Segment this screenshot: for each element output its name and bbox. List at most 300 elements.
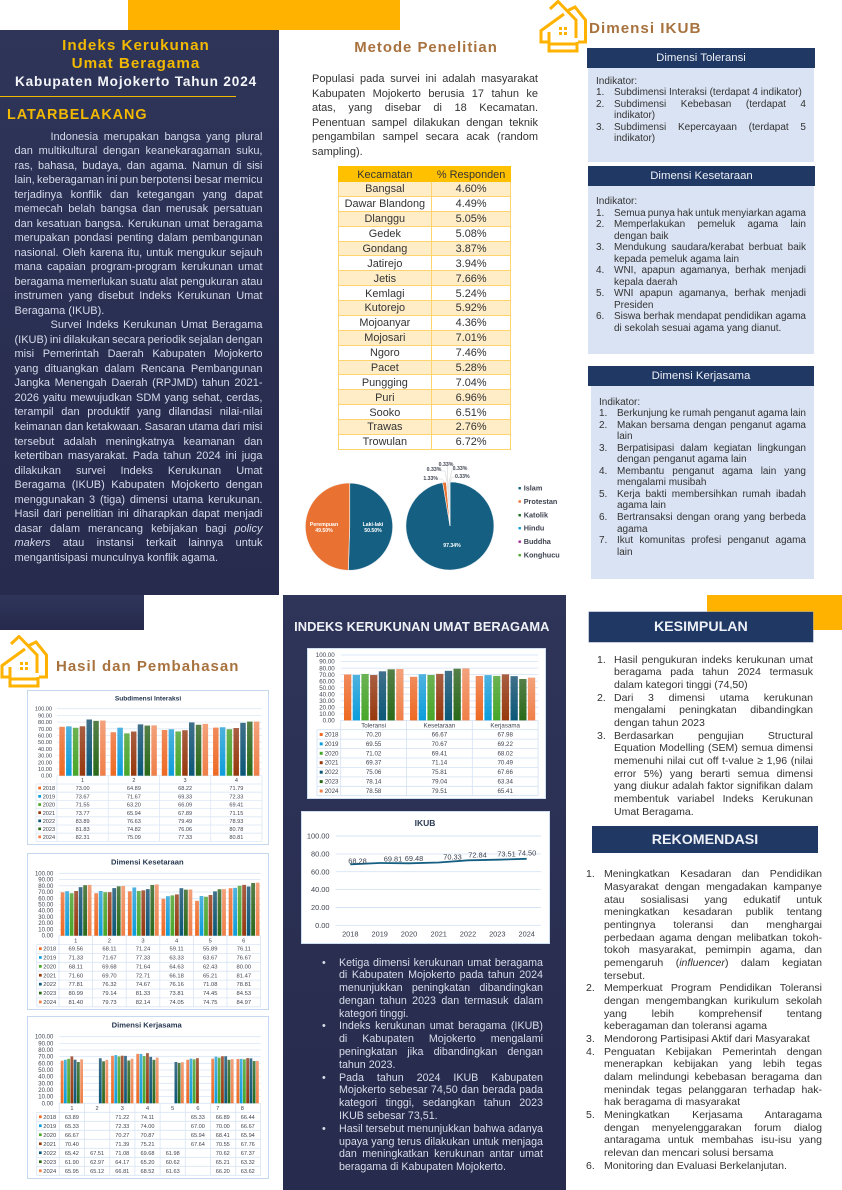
icon: house hasil (0, 635, 48, 688)
text: rekomendasi: Meningkatkan Kerjasama Antaragama (604, 1109, 822, 1121)
title (15, 36, 257, 89)
text: kesimpulan (597, 654, 813, 818)
chart: subdimensi interaksi: 64.89 (127, 786, 141, 792)
orange header band (128, 0, 400, 30)
chart: dimensi kesetaraan: 76.67 (237, 956, 251, 962)
chart: subdimensi interaksi: 66.09 (178, 803, 192, 809)
text: 4. (586, 1046, 595, 1058)
chart: ikub line: 69.81 (384, 854, 402, 863)
chart: dimensi kerjasama: 66.44 (241, 1115, 255, 1121)
chart: dimensi kesetaraan: 65.21 (203, 973, 217, 979)
table: responden per kecamatan: 5.24% (456, 288, 487, 300)
chart: ikub line: 0.00 (315, 921, 330, 930)
panel header (588, 166, 815, 186)
chart: dimensi kesetaraan: 4 (175, 938, 179, 944)
panel: dimensi toleransi: 1. (596, 87, 604, 98)
text: rekomendasi: tokoh masyarakat, pemimpin agama, dan (604, 944, 822, 956)
chart: dimensi kesetaraan: 66.18 (169, 973, 184, 979)
text: rekomendasi: Masyarakat dengan mengadakan kampanye (604, 881, 822, 893)
chart: dimensi kerjasama: 65.33 (65, 1124, 79, 1130)
chart: dimensi utama per tahun: 20.00 (320, 705, 336, 712)
chart: dimensi kesetaraan: 2022 (43, 982, 56, 988)
chart: dimensi kesetaraan: 78.81 (237, 982, 251, 988)
text: 3. (586, 1033, 595, 1045)
text: rekomendasi: keberagaman dan toleransi agama (604, 1020, 767, 1032)
text: rekomendasi: yang lebih komprehensif tentang (604, 1008, 822, 1020)
chart: ikub line: 2022 (460, 930, 476, 939)
chart: subdimensi interaksi: 79.49 (178, 819, 192, 825)
chart: dimensi kesetaraan: 80.00 (38, 884, 54, 890)
chart: dimensi kesetaraan: 79.73 (102, 1000, 117, 1006)
text: rekomendasi: menindak tegas pelanggaran terhadap hak- (604, 1084, 822, 1096)
chart: dimensi kesetaraan: 3 (141, 938, 145, 944)
text: kesimpulan: memenuhi nilai cut off t-value ≥ 1,96 (nilai (614, 755, 813, 767)
text: bullet points: peningkatan jika dibandingkan dengan (339, 1046, 543, 1058)
chart: dimensi kerjasama: 1 (70, 1106, 73, 1112)
text: kesimpulan: Dari 3 dimensi utama kerukunan (614, 692, 813, 704)
chart: subdimensi interaksi: 73.67 (76, 794, 90, 800)
text: bullet points: Indeks kerukunan umat beragama (IKUB) (339, 1020, 543, 1032)
legend: agama: Katolik (524, 510, 549, 520)
text: rekomendasi: hak beragama di masyarakat (604, 1096, 740, 1108)
table: responden per kecamatan: 5.05% (456, 213, 487, 225)
chart: subdimensi interaksi: 78.93 (229, 819, 243, 825)
table: responden per kecamatan: Jetis (374, 273, 396, 285)
panel: indeks kerukunan umat beragama (283, 595, 566, 1190)
chart: dimensi utama per tahun: 40.00 (320, 692, 336, 699)
panel: indeks kerukunan umat beragama: • (322, 1020, 326, 1032)
chart: dimensi kesetaraan: 74.75 (203, 1000, 217, 1006)
chart: subdimensi interaksi: 90.00 (38, 713, 52, 719)
text: bullet points: upaya yang terus dilakukan untuk menjaga (339, 1136, 543, 1148)
text: bullet points: tahun 2023. (339, 1059, 395, 1071)
title: Umat Beragama (72, 54, 200, 72)
chart: dimensi kesetaraan: 63.33 (169, 956, 184, 962)
chart: dimensi kerjasama: 64.17 (115, 1160, 129, 1166)
table: responden per kecamatan (338, 166, 511, 450)
chart: dimensi kerjasama: 66.89 (216, 1115, 230, 1121)
legend: agama: Protestan (524, 497, 557, 506)
indicator list: Berkunjung ke rumah penganut agama lain (617, 408, 806, 419)
chart: dimensi kerjasama: 65.94 (241, 1133, 255, 1139)
text: bullet points: Ketiga dimensi kerukunan umat beragama (339, 956, 543, 968)
text: latar belakang body: mengantisipasi munculnya konflik agama. (14, 552, 218, 564)
text: rekomendasi: antaragama untuk membahas isu-isu yang (604, 1134, 822, 1146)
panel: dimensi kesetaraan: 1. (596, 208, 604, 219)
chart: dimensi utama per tahun: 70.20 (366, 732, 382, 739)
chart: dimensi kesetaraan: 71.67 (102, 956, 117, 962)
panel header: Dimensi Kerjasama (652, 370, 750, 382)
chart: subdimensi interaksi: 73.77 (76, 811, 90, 817)
text: bullet points: di Kabupaten Mojokerto pada tahun 2024 (339, 969, 543, 981)
chart: dimensi kerjasama: 50.00 (38, 1068, 54, 1074)
text: kesimpulan: yang diukur adalah faktor signifikan dalam (614, 780, 813, 792)
chart: dimensi utama per tahun: 69.55 (366, 741, 382, 748)
chart: dimensi kerjasama: 61.90 (65, 1160, 79, 1166)
text: rekomendasi: dengan menyelenggarakan forum dialog (604, 1122, 822, 1134)
chart: subdimensi interaksi: 67.89 (178, 811, 192, 817)
chart: dimensi kerjasama: 2021 (43, 1142, 56, 1148)
text: latar belakang body: tersebut adalah meningkatnya keamanan dan (14, 436, 262, 448)
text: rekomendasi: Meningkatkan Kesadaran dan Pendidikan (604, 868, 822, 880)
chart: dimensi kesetaraan: 72.71 (136, 973, 150, 979)
chart: dimensi kesetaraan: 55.89 (203, 947, 217, 953)
chart: dimensi kerjasama: 66.81 (115, 1169, 129, 1175)
chart: subdimensi interaksi: 71.55 (76, 803, 90, 809)
chart: dimensi kerjasama: 66.20 (216, 1169, 230, 1175)
chart: pie agama: 97.34% (443, 543, 461, 549)
indicator list: kepada pemeluk agama lain (614, 254, 739, 265)
panel: dimensi kesetaraan: 3. (596, 242, 604, 253)
chart: dimensi utama per tahun (307, 648, 546, 799)
chart: dimensi utama per tahun: 2022 (325, 769, 339, 776)
indicator list: Makan bersama dengan penganut agama (617, 420, 806, 431)
chart: dimensi utama per tahun: 67.98 (498, 732, 514, 739)
title: Kabupaten Mojokerto Tahun 2024 (15, 74, 257, 88)
chart: pie agama: 0.33% (455, 474, 470, 480)
chart: dimensi kerjasama: 2024 (43, 1169, 57, 1175)
table: responden per kecamatan: 6.72% (456, 436, 487, 448)
text: 1. (586, 868, 595, 880)
chart: subdimensi interaksi: 50.00 (38, 740, 52, 746)
panel header (587, 48, 815, 68)
chart: subdimensi interaksi: 70.00 (38, 727, 52, 733)
indicator list: agama lain (617, 500, 666, 511)
title underline (0, 96, 236, 97)
chart: ikub line: 2021 (430, 930, 447, 939)
chart: dimensi kesetaraan: 73.81 (169, 991, 184, 997)
table: responden per kecamatan: Bangsal (365, 183, 405, 195)
chart: dimensi kesetaraan: 2020 (43, 964, 56, 970)
text: latar belakang body: lain, keberagaman ini pun berpotensi besar memicu (14, 174, 262, 186)
chart: pie jenis kelamin: Laki-laki (363, 522, 384, 528)
chart: dimensi kesetaraan: 74.05 (169, 1000, 184, 1006)
chart: subdimensi interaksi: Subdimensi Interaksi (115, 696, 181, 703)
chart: ikub line: 2023 (489, 930, 506, 939)
chart: subdimensi interaksi: 60.00 (38, 734, 52, 740)
panel header: Dimensi Kesetaraan (650, 170, 753, 182)
chart: subdimensi interaksi: 2021 (43, 811, 55, 817)
chart: subdimensi interaksi: 10.00 (38, 767, 52, 773)
indicator list: kepala daerah (614, 277, 677, 288)
table: responden per kecamatan: Mojoanyar (359, 317, 410, 329)
table: responden per kecamatan: 2.76% (456, 421, 487, 433)
table: responden per kecamatan: Gedek (369, 228, 401, 240)
chart: dimensi utama per tahun: 69.41 (432, 751, 448, 758)
text: kesimpulan: beragama pada tahun 2024 termasuk (614, 666, 813, 678)
table: responden per kecamatan: Pungging (362, 377, 408, 389)
text: latar belakang body: instrumen yang disebut Indeks Kerukunan Umat (14, 290, 262, 302)
text: kesimpulan: dalam kategori tinggi (74,50) (614, 679, 748, 691)
chart: subdimensi interaksi: 74.82 (127, 827, 141, 833)
chart: dimensi kerjasama: 65.33 (191, 1115, 205, 1121)
text: latar belakang body: ras, bahasa, budaya, dan agama. Namun di sisi (14, 160, 262, 172)
chart: subdimensi interaksi: 71.15 (229, 811, 243, 817)
chart: subdimensi interaksi: 65.94 (127, 811, 141, 817)
chart: dimensi kerjasama: 2019 (43, 1124, 56, 1130)
icon: house top (540, 0, 587, 52)
chart: subdimensi interaksi: 75.09 (127, 835, 141, 841)
text: latar belakang body: memecah belah bangsa dan merusak persatuan (14, 203, 262, 215)
chart: dimensi kerjasama: 68.52 (140, 1169, 154, 1175)
text: rekomendasi: dalam melindungi kebebasan beragama dan (604, 1071, 822, 1083)
chart: dimensi kerjasama: 0.00 (42, 1101, 54, 1107)
chart: dimensi kesetaraan: 100.00 (35, 871, 54, 877)
chart: dimensi kerjasama: 30.00 (38, 1081, 54, 1087)
chart: dimensi utama per tahun: 0.00 (323, 718, 336, 725)
panel: dimensi kerjasama: 4. (599, 466, 607, 477)
chart: dimensi kerjasama: 65.94 (191, 1133, 205, 1139)
chart: dimensi utama per tahun: 69.37 (366, 760, 382, 767)
chart: dimensi kerjasama: 63.89 (65, 1115, 79, 1121)
indicator list: indikator) (614, 133, 655, 144)
text: bullet points: Hasil tersebut menunjukkan bahwa adanya (339, 1123, 543, 1135)
chart: dimensi kesetaraan: 74.45 (203, 991, 217, 997)
chart: subdimensi interaksi: 69.33 (178, 794, 192, 800)
text: bullet points: menunjukkan peningkatan dibandingkan (339, 982, 543, 994)
chart: dimensi kesetaraan: 68.11 (102, 947, 116, 953)
text: bullet points (322, 956, 543, 1173)
indicator list: Membantu penganut agama lain yang (617, 466, 806, 477)
chart: dimensi kesetaraan: 71.33 (69, 956, 83, 962)
chart: dimensi utama per tahun: 70.49 (498, 760, 514, 767)
panel: dimensi kerjasama: 2. (599, 420, 607, 431)
chart: dimensi utama per tahun: 70.00 (320, 672, 336, 679)
chart: dimensi kesetaraan: 71.64 (136, 964, 151, 970)
table: responden per kecamatan: 5.28% (456, 362, 487, 374)
text: latar belakang body: dilakukan survei Indeks Kerukunan Umat (14, 465, 262, 477)
text: rekomendasi: meningkatkan kesadaran publik tentang (604, 906, 822, 918)
indicator list: Indikator: (596, 76, 637, 86)
panel: dimensi toleransi (587, 48, 815, 162)
chart: dimensi kerjasama: 6 (196, 1106, 199, 1112)
table: responden per kecamatan: 6.96% (456, 392, 487, 404)
text: latar belakang body: (IKUB) ini dilakukan secara periodik sejalan dengan (14, 334, 262, 346)
chart: subdimensi interaksi: 76.06 (178, 827, 192, 833)
chart: dimensi utama per tahun: 2020 (325, 751, 339, 758)
text: kesimpulan: mengalami peningkatan dibandingkan (614, 704, 813, 716)
indicator list: dengan baik (614, 231, 668, 242)
text: kesimpulan: Equation Modelling (SEM) semua dimensi (614, 742, 813, 754)
chart: dimensi kesetaraan: 1 (74, 938, 77, 944)
chart: dimensi utama per tahun: 60.00 (320, 679, 336, 686)
panel body (588, 186, 814, 354)
chart: dimensi utama per tahun: 75.81 (432, 769, 448, 776)
indicator list: lain (617, 547, 633, 558)
indicator list: di sekolah sesuai agama yang dianut. (614, 323, 781, 334)
chart: dimensi kesetaraan: 0.00 (42, 934, 54, 940)
chart: subdimensi interaksi: 63.20 (127, 803, 141, 809)
panel: indeks kerukunan umat beragama: • (322, 1072, 326, 1084)
chart: subdimensi interaksi: 0.00 (41, 774, 52, 780)
chart: dimensi kesetaraan: 69.56 (69, 947, 83, 953)
chart: pie agama: 0.33% (453, 466, 468, 472)
chart: dimensi kesetaraan: 81.33 (136, 991, 150, 997)
chart: subdimensi interaksi: 76.63 (127, 819, 141, 825)
indicator list: Mendukung saudara/kerabat berbuat baik (614, 242, 806, 253)
heading: rekomendasi: REKOMENDASI (652, 832, 758, 848)
text: rekomendasi: Monitoring dan Evaluasi Berkelanjutan. (604, 1160, 787, 1172)
chart: dimensi kerjasama: 100.00 (35, 1035, 54, 1041)
text: metode penelitian: atas, yang disebar di 18 Kecamatan. (312, 102, 538, 114)
panel: dimensi kesetaraan (588, 166, 815, 354)
chart: dimensi kesetaraan: 71.60 (69, 973, 83, 979)
table: responden per kecamatan: Trawas (367, 421, 402, 433)
chart: dimensi utama per tahun: 65.41 (498, 788, 514, 795)
chart: subdimensi interaksi: 100.00 (35, 707, 52, 713)
chart: dimensi kesetaraan: 2019 (43, 956, 56, 962)
chart: dimensi kerjasama: 40.00 (38, 1075, 54, 1081)
chart: dimensi kesetaraan: 81.40 (69, 1000, 83, 1006)
chart: dimensi kesetaraan: 84.97 (237, 1000, 251, 1006)
chart: dimensi kerjasama: 90.00 (38, 1041, 54, 1047)
chart: dimensi kerjasama: 8 (241, 1106, 244, 1112)
text: rekomendasi (586, 868, 822, 1172)
chart: dimensi kerjasama: 2022 (43, 1151, 56, 1157)
table: responden per kecamatan: 4.36% (456, 317, 487, 329)
chart: dimensi kesetaraan: 64.63 (169, 964, 184, 970)
chart: dimensi kerjasama: 70.40 (65, 1142, 79, 1148)
chart: dimensi kesetaraan: 74.67 (136, 982, 150, 988)
text: kesimpulan: error 5%) yang berarti semua dimensi (614, 768, 813, 780)
text: 2. (586, 982, 595, 994)
table: responden per kecamatan: Kutorejo (365, 302, 405, 314)
text: latar belakang body: yang dituangkan dalam Rencana Pembangunan (14, 363, 262, 375)
indicator list: WNI, apapun agamanya, berhak menjadi (614, 265, 806, 276)
chart: dimensi kerjasama: 3 (121, 1106, 124, 1112)
orange accent right (707, 595, 842, 630)
chart: dimensi kesetaraan: 6 (242, 938, 245, 944)
indicator list: Indikator: (596, 196, 637, 207)
text: latar belakang body: ketertiban masyarakat. Pada tahun 2024 ini juga (14, 450, 262, 462)
table: responden per kecamatan: 4.60% (456, 183, 487, 195)
heading: kesimpulan (589, 612, 813, 642)
text: rekomendasi: pemengaruh (influencer) dalam kegiatan (604, 957, 822, 969)
chart: dimensi kesetaraan: 77.81 (69, 982, 83, 988)
chart: dimensi kesetaraan: 69.70 (102, 973, 117, 979)
text: bullet points: kategori tinggi, sedangkan tahun 2023 (339, 1097, 543, 1109)
text: latar belakang body: 2026 yaitu mewujudkan SDM yang sehat, cerdas, (14, 392, 262, 404)
indicator list: lain (617, 431, 633, 442)
table: responden per kecamatan: 7.46% (456, 347, 487, 359)
table: responden per kecamatan: 6.51% (456, 407, 487, 419)
table: responden per kecamatan: Trowulan (363, 436, 407, 448)
chart: dimensi kerjasama: 7 (216, 1106, 219, 1112)
table: responden per kecamatan: 3.87% (456, 243, 487, 255)
panel: dimensi kesetaraan: 2. (596, 219, 604, 230)
panel: dimensi toleransi: 2. (596, 99, 604, 110)
text: bullet points: Mojokerto sebesar 74,50 dan berada pada (339, 1084, 543, 1096)
chart: dimensi kerjasama: 70.00 (38, 1055, 54, 1061)
text: metode penelitian (312, 73, 538, 158)
chart: ikub line: 2018 (342, 930, 359, 939)
table: responden per kecamatan: Sooko (369, 407, 400, 419)
text: latar belakang body: makers atau instansi terkait lainnya untuk (14, 537, 262, 549)
chart: subdimensi interaksi: 69.41 (229, 803, 243, 809)
chart: dimensi kerjasama: 67.64 (191, 1142, 205, 1148)
table: responden per kecamatan: Mojosari (364, 332, 405, 344)
chart: dimensi kerjasama: 10.00 (38, 1095, 54, 1101)
chart: subdimensi interaksi: 2022 (43, 819, 55, 825)
chart: dimensi utama per tahun: 71.14 (432, 760, 448, 767)
chart: ikub line: 74.50 (518, 848, 536, 857)
text: metode penelitian: sampling). (312, 146, 363, 158)
panel header: Dimensi Toleransi (656, 52, 746, 64)
chart: dimensi kesetaraan: 79.14 (102, 991, 117, 997)
chart: subdimensi interaksi: 73.00 (76, 786, 90, 792)
chart: dimensi kerjasama: 74.11 (141, 1115, 154, 1121)
chart: dimensi kesetaraan: 62.43 (203, 964, 217, 970)
chart: subdimensi interaksi (27, 690, 268, 844)
chart: dimensi utama per tahun: Toleransi (362, 723, 386, 730)
indicator list: Kerja bakti membersihkan rumah ibadah (617, 489, 806, 500)
chart: subdimensi interaksi: 2020 (43, 803, 55, 809)
chart: dimensi kesetaraan: 84.53 (237, 991, 251, 997)
heading: kesimpulan: KESIMPULAN (654, 619, 748, 635)
text: latar belakang body: merupakan pondasi penting dalam pembangunan (14, 232, 262, 244)
indicator list: indikator) (614, 110, 655, 121)
text: rekomendasi: pentingnya toleransi dan menghargai (604, 919, 822, 931)
chart: dimensi kesetaraan: 68.11 (69, 964, 83, 970)
chart: dimensi kerjasama: 65.12 (90, 1169, 104, 1175)
indicator list: Subdimensi Kepercayaan (terdapat 5 (614, 122, 806, 133)
chart: dimensi utama per tahun: 100.00 (316, 652, 336, 659)
indicator list (596, 196, 806, 334)
panel: dimensi kerjasama: 1. (599, 408, 607, 419)
chart: dimensi utama per tahun: 30.00 (320, 698, 336, 705)
legend: agama: Buddha (524, 537, 552, 546)
chart: ikub line: 2019 (371, 930, 388, 939)
chart: pie agama: 0.33% (439, 462, 454, 468)
chart: subdimensi interaksi: 72.33 (229, 794, 243, 800)
table: responden per kecamatan: Gondang (362, 243, 407, 255)
chart: dimensi kesetaraan: 80.99 (69, 991, 83, 997)
chart: dimensi kerjasama: 70.62 (216, 1151, 230, 1157)
chart: subdimensi interaksi: 1 (81, 778, 84, 784)
text: bullet points: dan meningkatkan kerukunan antar umat (339, 1148, 543, 1160)
chart: dimensi kesetaraan: 81.47 (237, 973, 251, 979)
chart: ikub line: 40.00 (311, 885, 330, 894)
chart: ikub line: 2020 (401, 930, 417, 939)
chart: subdimensi interaksi: 3 (184, 778, 187, 784)
chart: ikub line: 69.48 (405, 854, 423, 863)
chart: dimensi utama per tahun: 79.04 (432, 779, 448, 786)
chart: dimensi kesetaraan: 59.11 (170, 947, 184, 953)
table: responden per kecamatan: Jatirejo (367, 258, 402, 270)
chart: dimensi kerjasama: 20.00 (38, 1088, 54, 1094)
indicator list (599, 396, 806, 558)
heading: dimensi ikub: Dimensi IKUB (589, 20, 701, 37)
indicator list: Berpatisipasi dalam kegiatan lingkungan (617, 443, 806, 454)
chart: dimensi kerjasama: 61.63 (166, 1169, 180, 1175)
legend: agama (518, 484, 560, 560)
chart: dimensi kerjasama: 70.27 (115, 1133, 129, 1139)
chart: dimensi kesetaraan: 2018 (43, 947, 56, 953)
chart: ikub line: 60.00 (311, 867, 330, 876)
text: kesimpulan: membentuk variabel Indeks Kerukunan (614, 793, 813, 805)
legend: agama: Islam (524, 484, 543, 492)
panel body (591, 386, 814, 578)
text: metode penelitian: Kabupaten Mojokerto berusia 17 tahun ke (312, 88, 538, 100)
chart: dimensi kerjasama: 60.62 (166, 1160, 180, 1166)
text: latar belakang body (14, 131, 263, 564)
panel body (588, 68, 814, 162)
chart: dimensi utama per tahun: 2019 (325, 741, 339, 748)
chart: dimensi utama per tahun: 78.58 (366, 788, 382, 795)
chart: dimensi kesetaraan: 70.00 (38, 890, 54, 896)
chart: dimensi kesetaraan: 40.00 (38, 909, 54, 915)
text: 1. (597, 654, 606, 666)
